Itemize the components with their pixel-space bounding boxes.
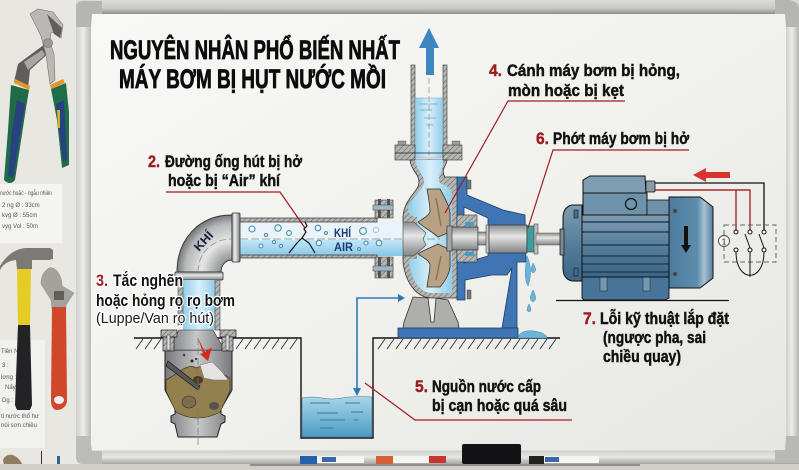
air label: KHÍ [334, 227, 352, 240]
cause 7 label: chiều quay) [603, 348, 681, 366]
tool: water pump pliers [4, 9, 69, 183]
cause 3 label: 3. [96, 271, 108, 290]
blue bracket [398, 177, 526, 338]
discharge flange [395, 141, 462, 160]
air bubbles [249, 225, 382, 250]
electric motor [560, 176, 713, 300]
discharge pipe [411, 65, 447, 180]
title: MÁY BƠM BỊ HỤT NƯỚC MỒI [119, 64, 386, 94]
note paper bottom: nói sơn chiều [1, 423, 37, 429]
cause 3 label: hoặc hỏng rọ rọ bơm [96, 292, 235, 310]
cause 3 label [96, 271, 235, 327]
cause 2 label: 2. [148, 152, 160, 171]
note paper top [0, 184, 62, 243]
note paper bottom: Nấy [5, 385, 16, 391]
clogged strainer [161, 330, 236, 445]
ground and sump [134, 338, 560, 438]
cause 2 label: Đường ống hút bị hở [165, 153, 302, 171]
impeller [418, 189, 450, 287]
cause 7 label: (ngược pha, sai [603, 329, 706, 347]
end bell [560, 205, 582, 281]
small tools bottom left [3, 451, 60, 470]
suction elbow [175, 213, 240, 280]
cause 7 label: 7. [583, 309, 596, 328]
cause 4 label: Cánh máy bơm bị hỏng, [507, 62, 680, 80]
note paper top: kvg Ø : 55cm [2, 213, 37, 219]
note paper top: nước hoặc - ngẫu nhiên [0, 188, 52, 197]
suction pipe with air and water: AIR [334, 242, 354, 254]
cause 6 label: Phớt máy bơm bị hở [553, 130, 689, 148]
red direction arrow [693, 168, 730, 182]
note paper bottom: lơng : 4m2 [1, 375, 30, 381]
finned body [582, 200, 669, 277]
motor wiring [655, 183, 776, 277]
note paper top: vyg Vol : 50m [2, 224, 38, 230]
crack in pipe [289, 222, 315, 253]
cause 7 label: Lỗi kỹ thuật lắp đặt [600, 309, 729, 328]
cause 3 label: (Luppe/Van rọ hút) [96, 310, 214, 327]
cause 5 label: 5. [415, 377, 428, 396]
cause 4 label [445, 61, 680, 213]
elbow label: KHÍ [190, 227, 217, 254]
motor feet [582, 277, 669, 300]
cause 2 label: hoặc bị “Air” khí [168, 172, 281, 190]
cause 5 label: Nguồn nước cấp [432, 378, 541, 396]
upward discharge arrow [419, 28, 439, 75]
cause 7 label [583, 309, 729, 366]
note paper bottom: Dg : [2, 398, 13, 404]
cause 4 label: mòn hoặc bị kẹt [508, 82, 624, 100]
note paper bottom: 3 : [2, 363, 9, 369]
title: NGUYÊN NHÂN PHỔ BIẾN NHẤT [110, 35, 400, 65]
cause 5 label: bị cạn hoặc quá sâu [432, 397, 567, 415]
suction pipe below elbow [178, 280, 220, 330]
fan cover [669, 197, 713, 288]
suction pipe with air and water [240, 199, 440, 278]
rotation arrow [681, 226, 691, 253]
red arrow into strainer [198, 338, 212, 361]
pump pedestal [403, 297, 459, 328]
note paper bottom [0, 340, 45, 448]
tool: hammer [0, 248, 53, 410]
note paper bottom: Tiên Ng [1, 349, 22, 355]
note paper bottom: ti nước thổ hư [1, 413, 39, 420]
leaking water drops [518, 256, 547, 338]
cause 6 label: 6. [536, 129, 549, 148]
debris [166, 354, 230, 418]
shaft and bearing housing [447, 215, 564, 262]
cause 4 label: 4. [489, 61, 502, 80]
tool: adjustable wrench [41, 268, 74, 410]
terminal box [583, 176, 655, 215]
title [110, 35, 400, 94]
cause 6 label [528, 129, 689, 228]
motor wiring: 1 [722, 238, 727, 246]
pump inlet cone [403, 222, 426, 256]
cause 3 label: Tắc nghẽn [113, 271, 183, 290]
water in sump [302, 397, 372, 437]
note paper top: 2 ng Ø : 33cm [2, 203, 40, 209]
cause 2 label [148, 152, 305, 228]
motor ground line [556, 300, 729, 302]
cause 5 label [365, 377, 572, 420]
flow arrow from sump to pump [353, 294, 405, 396]
pump volute casing [403, 160, 458, 298]
marker tray items [300, 444, 599, 464]
